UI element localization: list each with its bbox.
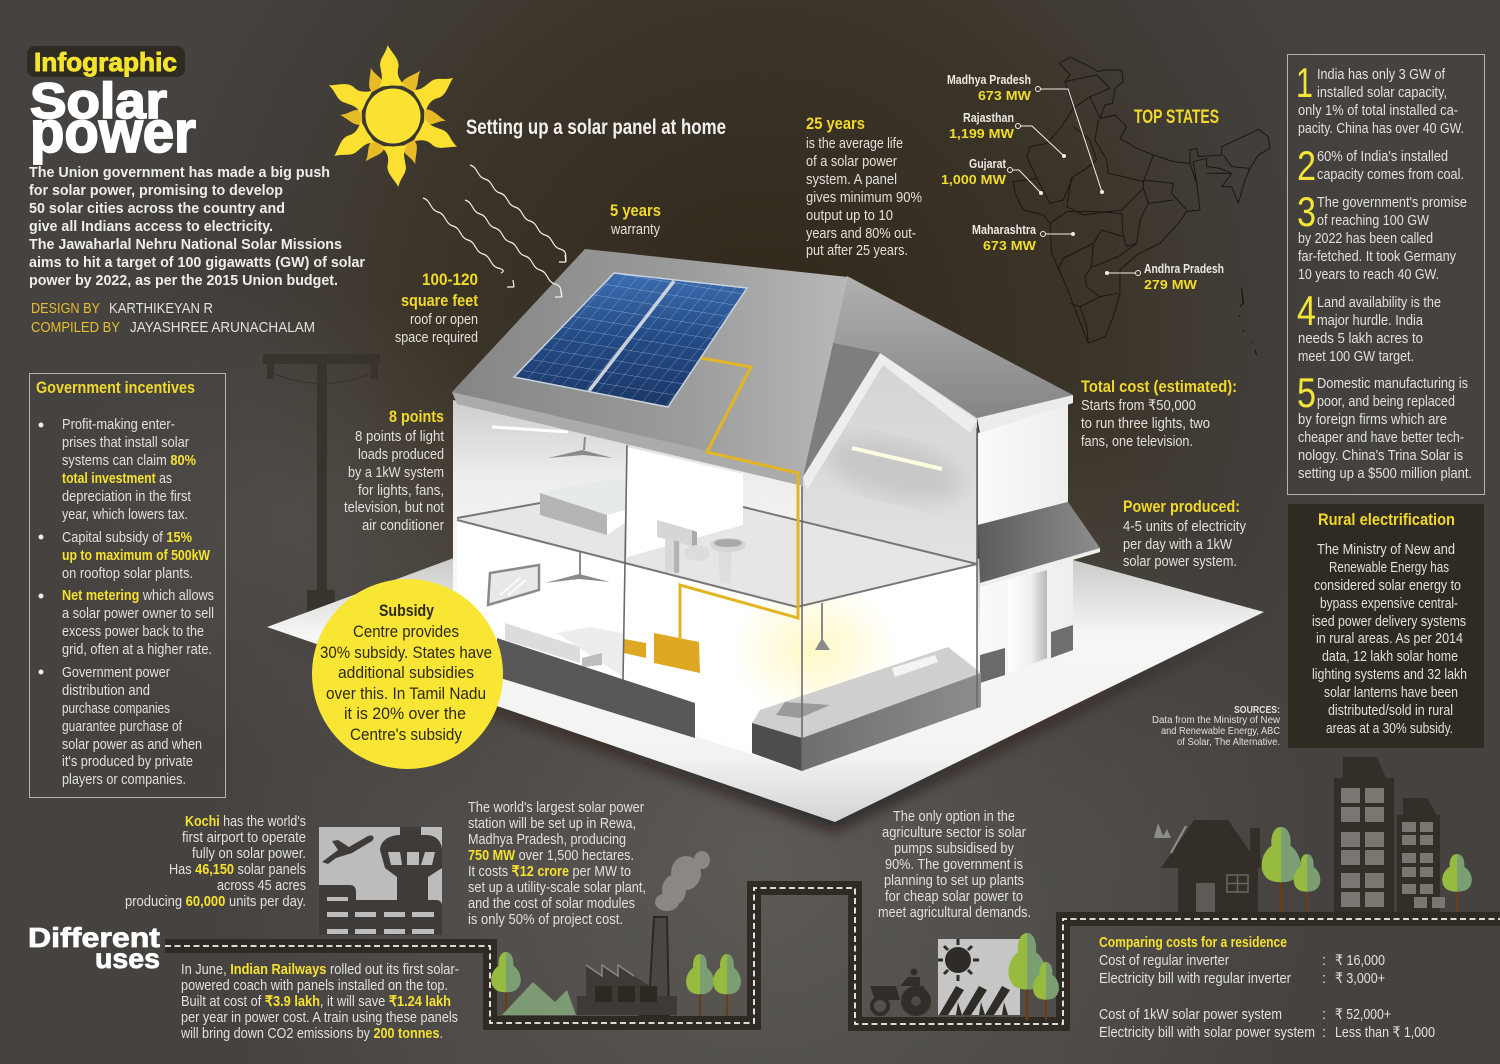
callout: subsidy: it is 20% over the — [344, 704, 466, 723]
panel body — [1312, 542, 1467, 737]
title block — [27, 46, 365, 336]
panel body: bypass expensive central- — [1320, 596, 1458, 612]
text: agriculture: meet agricultural demands. — [878, 905, 1031, 921]
text: power produced: per day with a 1kW — [1123, 537, 1232, 553]
panel: comparing costs: Cost of regular inverter — [1099, 953, 1229, 969]
solar panels — [514, 273, 747, 407]
panel: comparing costs: : — [1322, 1007, 1326, 1023]
credits — [31, 300, 315, 336]
text: 25 years: output up to 10 — [806, 208, 893, 224]
plinth — [497, 638, 695, 738]
text: total cost: to run three lights, two — [1081, 416, 1210, 432]
fact 1: pacity. China has over 40 GW. — [1298, 121, 1464, 137]
callout: subsidy — [312, 579, 503, 769]
text: total cost: fans, one television. — [1081, 434, 1193, 450]
text: 25 years: of a solar power — [806, 154, 897, 170]
heading: Solar power: Solar — [30, 73, 167, 129]
map outline — [1013, 57, 1270, 355]
panel: comparing costs: Electricity bill with regular inverter — [1099, 971, 1291, 987]
fact 3 — [1297, 188, 1467, 283]
fact 4: major hurdle. India — [1317, 313, 1424, 329]
panel body: considered solar energy to — [1314, 578, 1461, 594]
fact 5: setting up a $500 million plant. — [1298, 466, 1472, 482]
text: Kochi airport: Kochi has the world's — [185, 814, 306, 830]
text: 25 years: is the average life — [806, 136, 903, 152]
text: power produced: Power produced: — [1123, 497, 1240, 516]
text: agriculture: The only option in the — [893, 809, 1015, 825]
text: 100-120 square feet: 100-120 — [422, 270, 478, 289]
intro text: The Union government has made a big push — [29, 165, 330, 181]
platform — [267, 552, 1264, 830]
fact 4: needs 5 lakh acres to — [1298, 331, 1423, 347]
panel: comparing costs — [1099, 934, 1435, 1041]
panel heading: Government incentives — [36, 378, 195, 397]
panel body: Renewable Energy has — [1329, 560, 1449, 576]
text: sources: of Solar, The Alternative. — [1177, 736, 1280, 748]
incentive list — [62, 417, 214, 788]
trees — [1262, 827, 1320, 912]
intro text: for solar power, promising to develop — [29, 183, 283, 199]
fact 3: of reaching 100 GW — [1317, 213, 1429, 229]
heading: Solar power — [30, 73, 196, 165]
text: power produced — [1123, 497, 1247, 570]
incentive list: systems can claim 80% — [62, 453, 196, 469]
panel: comparing costs: ₹ 52,000+ — [1335, 1007, 1391, 1023]
text: agriculture — [878, 809, 1031, 921]
state labels — [941, 72, 1224, 292]
text: Kochi airport: producing 60,000 units per day. — [125, 894, 306, 910]
text: 100-120 square feet — [395, 270, 478, 346]
text: agriculture: planning to set up plants — [884, 873, 1024, 889]
panel: comparing costs: Electricity bill with solar power system — [1099, 1025, 1315, 1041]
fact 3: by 2022 has been called — [1298, 231, 1433, 247]
fact 4: Land availability is the — [1317, 295, 1441, 311]
trees — [1008, 933, 1059, 1020]
text: 8 points: air conditioner — [362, 518, 444, 534]
intro text — [29, 165, 365, 289]
intro text: give all Indians access to electricity. — [29, 219, 273, 235]
credits: COMPILED BY — [31, 319, 120, 336]
text: agriculture: for cheap solar power to — [885, 889, 1023, 905]
text: Kochi airport: across 45 acres — [217, 878, 306, 894]
text: total cost: Total cost (estimated): — [1081, 377, 1237, 396]
incentive list: excess power back to the — [62, 624, 204, 640]
incentive list: depreciation in the first — [62, 489, 191, 505]
fact 5: Domestic manufacturing is — [1317, 376, 1468, 392]
text: Kochi airport — [125, 814, 306, 910]
text: agriculture: agriculture sector is solar — [882, 825, 1026, 841]
kitchen counter — [752, 647, 981, 771]
walls — [453, 353, 1073, 771]
text: sources: and Renewable Energy, ABC — [1161, 725, 1280, 737]
porch roof — [978, 502, 1100, 587]
intro text: aims to hit a target of 100 gigawatts (GW) of solar — [29, 255, 365, 271]
incentive list: guarantee purchase of — [62, 719, 183, 735]
fact 4: meet 100 GW target. — [1298, 349, 1414, 365]
state labels: Andhra Pradesh — [1144, 261, 1224, 276]
text: 25 years: years and 80% out- — [806, 226, 916, 242]
icon: sun — [324, 45, 462, 187]
sofa — [505, 623, 623, 677]
state labels: 1,199 MW — [949, 126, 1015, 141]
text: agriculture: 90%. The government is — [885, 857, 1023, 873]
fact 1: only 1% of total installed ca- — [1298, 103, 1458, 119]
wall television — [488, 565, 539, 605]
fact 1: 1 — [1296, 59, 1313, 106]
icon: factory with smoke and trees — [491, 851, 741, 1016]
text: 8 points: for lights, fans, — [358, 483, 444, 499]
fact 2 — [1297, 142, 1464, 189]
roof — [452, 249, 1073, 490]
state labels: Rajasthan — [963, 110, 1014, 125]
text: 25 years — [806, 114, 922, 259]
tower two — [1397, 798, 1445, 912]
incentive list: purchase companies — [62, 701, 170, 717]
incentive list: it's produced by private — [62, 754, 193, 770]
fact 2: 60% of India's installed — [1317, 149, 1448, 165]
intro text: 50 solar cities across the country and — [29, 201, 285, 217]
icon: airport — [319, 827, 442, 935]
text: 100-120 square feet: roof or open — [410, 312, 478, 328]
text: Indian Railways: powered coach with panels installed on the top. — [181, 978, 448, 994]
fact 5: by foreign firms which are — [1298, 412, 1447, 428]
panel: comparing costs: Less than ₹ 1,000 — [1335, 1025, 1435, 1041]
incentive list: on rooftop solar plants. — [62, 566, 193, 582]
text: 8 points: television, but not — [344, 500, 444, 516]
fact 5 — [1297, 369, 1472, 482]
fact 2: 2 — [1297, 142, 1316, 189]
wiring — [680, 358, 798, 640]
panel body: data, 12 lakh solar home — [1322, 649, 1458, 665]
fact 5: poor, and being replaced — [1317, 394, 1455, 410]
text: 100-120 square feet: square feet — [401, 291, 478, 310]
incentive list: total investment as — [62, 471, 172, 487]
incentive list: Profit-making enter- — [62, 417, 175, 433]
text: Indian Railways: will bring down CO2 emissions by 200 tonnes. — [180, 1026, 443, 1042]
fact 2: capacity comes from coal. — [1317, 167, 1464, 183]
panel: comparing costs: : — [1322, 971, 1326, 987]
callout: subsidy: 30% subsidy. States have — [320, 643, 492, 662]
fact 4 — [1297, 287, 1441, 365]
state labels: 673 MW — [983, 238, 1037, 253]
panel body: in rural areas. As per 2014 — [1316, 631, 1463, 647]
incentive list: up to maximum of 500kW — [62, 548, 210, 564]
heading: different uses: uses — [95, 943, 160, 974]
incentive list: year, which lowers tax. — [62, 507, 188, 523]
tree — [1442, 854, 1472, 912]
text: power produced: solar power system. — [1123, 554, 1237, 570]
incentive list: Capital subsidy of 15% — [62, 530, 192, 546]
toilet and washbasin — [657, 520, 746, 583]
text: world's largest solar station: station will be set up in Rewa, — [468, 816, 636, 832]
fact 1: installed solar capacity, — [1317, 85, 1447, 101]
lights — [492, 427, 942, 469]
text: 8 points — [344, 407, 444, 534]
fact 3: 10 years to reach 40 GW. — [1298, 267, 1439, 283]
panel: key facts — [1288, 54, 1484, 494]
tractor — [870, 968, 931, 1016]
panel: comparing costs: ₹ 3,000+ — [1335, 971, 1385, 987]
tag: Infographic: Infographic — [34, 47, 177, 77]
fact 3: 3 — [1297, 188, 1316, 235]
state labels: Gujarat — [969, 156, 1007, 171]
state labels: 279 MW — [1144, 277, 1198, 292]
text: 5 years warranty: warranty — [610, 222, 661, 238]
utility pole — [263, 354, 380, 632]
text: world's largest solar station: and the cost of solar modules — [468, 896, 635, 912]
callout: subsidy: Centre provides — [353, 622, 459, 641]
text: Kochi airport: Has 46,150 solar panels — [169, 862, 306, 878]
panel: comparing costs: Comparing costs for a residence — [1099, 934, 1287, 951]
text: total cost — [1081, 377, 1237, 450]
text: world's largest solar station: 750 MW over 1,500 hectares. — [468, 848, 634, 864]
floor slab — [457, 447, 977, 607]
panel: comparing costs: ₹ 16,000 — [1335, 953, 1385, 969]
text: 8 points: 8 points — [389, 407, 444, 426]
incentive list: a solar power owner to sell — [62, 606, 214, 622]
heading: different uses: Different — [28, 922, 160, 953]
credits: KARTHIKEYAN R — [109, 300, 213, 317]
panel body: distributed/sold in rural — [1328, 703, 1453, 719]
panel body: ised power delivery systems — [1312, 614, 1466, 630]
incentive list: Net metering which allows — [62, 588, 214, 604]
panel body: areas at a 30% subsidy. — [1326, 721, 1453, 737]
text: world's largest solar station: is only 50% of project cost. — [468, 912, 623, 928]
credits: JAYASHREE ARUNACHALAM — [130, 319, 315, 336]
callout: subsidy: Centre's subsidy — [350, 725, 462, 744]
fact 4: 4 — [1297, 287, 1316, 334]
solar storage boxes — [624, 633, 700, 673]
text: Indian Railways: Built at cost of ₹3.9 lakh, it will save ₹1.24 lakh — [181, 994, 451, 1010]
text: Indian Railways: In June, Indian Railways rolled out its first solar- — [181, 962, 459, 978]
text: 5 years warranty — [610, 201, 661, 238]
state labels: 673 MW — [978, 88, 1032, 103]
upstairs bed — [540, 478, 625, 535]
panel: comparing costs: : — [1322, 953, 1326, 969]
text: Kochi airport: fully on solar power. — [192, 846, 306, 862]
incentive list: solar power as and when — [62, 737, 202, 753]
road with dashed line — [165, 888, 1500, 1024]
callout: subsidy: additional subsidies — [338, 663, 474, 682]
incentive list: distribution and — [62, 683, 150, 699]
furniture — [488, 427, 981, 771]
map title: TOP STATES — [1134, 107, 1219, 128]
text: sources: SOURCES: — [1234, 704, 1280, 716]
callout: subsidy: over this. In Tamil Nadu — [326, 684, 486, 703]
text: world's largest solar station: Madhya Pradesh, producing — [468, 832, 626, 848]
text: 5 years warranty: 5 years — [610, 201, 661, 220]
fact 3: far-fetched. It took Germany — [1298, 249, 1457, 265]
bullet markers — [38, 422, 44, 674]
panel body: lighting systems and 32 lakh — [1312, 667, 1467, 683]
panel: government incentives — [30, 374, 226, 798]
icon: tractor and solar pump — [870, 933, 1059, 1020]
incentive list: players or companies. — [62, 772, 186, 788]
panel: comparing costs: : — [1322, 1025, 1326, 1041]
text: 8 points: 8 points of light — [355, 429, 444, 445]
fact 3: The government's promise — [1317, 195, 1467, 211]
state labels: Maharashtra — [972, 222, 1037, 237]
text: world's largest solar station: set up a utility-scale solar plant, — [468, 880, 646, 896]
house — [1154, 820, 1274, 912]
tower one — [1334, 757, 1394, 912]
fact 1: India has only 3 GW of — [1317, 67, 1446, 83]
text: 100-120 square feet: space required — [395, 330, 478, 346]
text: 25 years: system. A panel — [806, 172, 897, 188]
text: Indian Railways — [180, 962, 459, 1042]
panel body: The Ministry of New and — [1317, 542, 1455, 558]
glass edges — [623, 428, 977, 771]
heading: different uses — [28, 922, 160, 974]
incentive list: prises that install solar — [62, 435, 189, 451]
intro text: power by 2022, as per the 2015 Union budget. — [29, 273, 338, 289]
text: sources — [1152, 704, 1280, 748]
state leader lines — [1008, 86, 1140, 276]
text: world's largest solar station — [468, 800, 646, 928]
illustration: house cutaway — [267, 249, 1264, 830]
map: top states of India — [941, 57, 1270, 355]
fact 5: nology. China's Trina Solar is — [1298, 448, 1463, 464]
text: Indian Railways: per year in power cost. A train using these panels — [181, 1010, 458, 1026]
text: agriculture: pumps subsidised by — [894, 841, 1015, 857]
text: Kochi airport: first airport to operate — [182, 830, 306, 846]
fact 5: cheaper and have better tech- — [1298, 430, 1464, 446]
solar field — [938, 939, 1020, 1015]
text: sources: Data from the Ministry of New — [1152, 714, 1280, 726]
fact 1 — [1296, 59, 1464, 137]
text: 25 years: gives minimum 90% — [806, 190, 922, 206]
fact 5: 5 — [1297, 369, 1316, 416]
text: world's largest solar station: The world's largest solar power — [468, 800, 644, 816]
state labels: Madhya Pradesh — [947, 72, 1031, 87]
text: world's largest solar station: It costs ₹12 crore per MW to — [468, 864, 631, 880]
heading: Solar power: power — [30, 100, 196, 165]
heading: setting up a solar panel at home: Setting up a solar panel at home — [466, 116, 726, 139]
credits: DESIGN BY — [31, 300, 100, 317]
panel: comparing costs: Cost of 1kW solar power system — [1099, 1007, 1282, 1023]
callout: subsidy: Subsidy — [379, 601, 434, 620]
text: 8 points: loads produced — [358, 447, 444, 463]
incentive list: grid, often at a higher rate. — [62, 642, 212, 658]
text: 25 years: 25 years — [806, 114, 865, 133]
arrows: sun rays — [423, 165, 566, 297]
state labels: 1,000 MW — [941, 172, 1007, 187]
text: power produced: 4-5 units of electricity — [1123, 519, 1247, 535]
panel body: solar lanterns have been — [1324, 685, 1458, 701]
panel: rural electrification — [1288, 504, 1484, 748]
intro text: The Jawaharlal Nehru National Solar Missions — [29, 237, 342, 253]
panel heading: Rural electrification — [1318, 510, 1455, 529]
text: 8 points: by a 1kW system — [348, 465, 444, 481]
incentive list: Government power — [62, 665, 170, 681]
text: total cost: Starts from ₹50,000 — [1081, 398, 1196, 414]
text: 25 years: put after 25 years. — [806, 243, 908, 259]
ceiling fans — [545, 437, 830, 650]
icon: city with rooftop solar — [1154, 757, 1472, 912]
